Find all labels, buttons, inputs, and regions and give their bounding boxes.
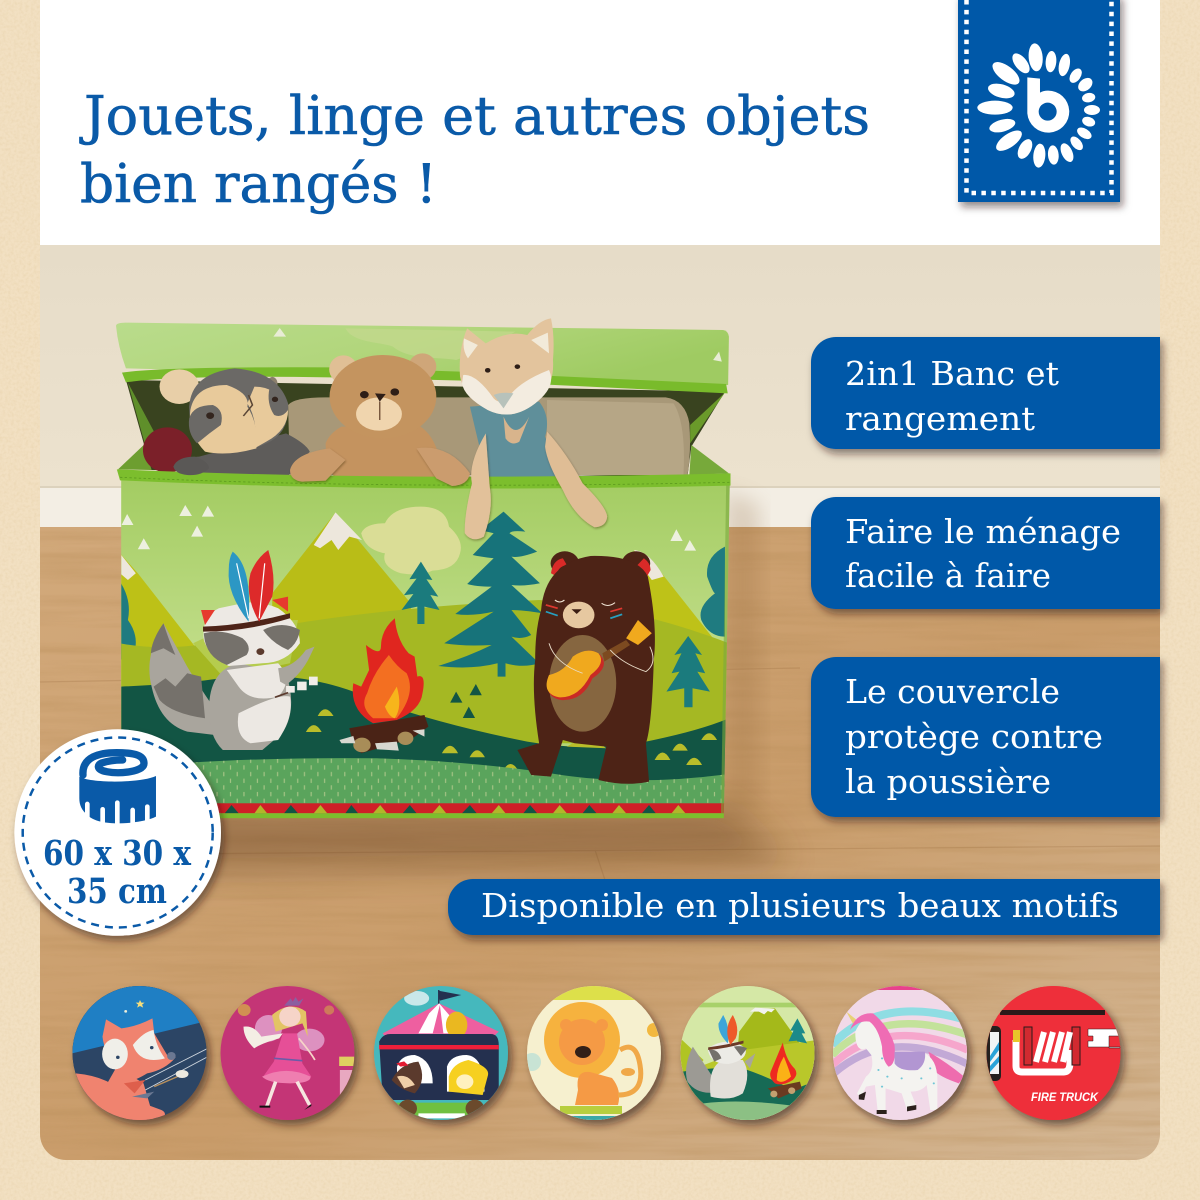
callout: couvercle: protège contre bbox=[845, 717, 1103, 756]
rim of the box bbox=[117, 469, 730, 488]
plush raccoon bbox=[160, 368, 310, 478]
baseboard bbox=[40, 486, 1160, 529]
photo scene bbox=[40, 245, 1160, 1167]
lid band bbox=[122, 367, 728, 393]
cloud bbox=[361, 507, 461, 574]
motif: fire truck bbox=[985, 986, 1121, 1132]
lid top bbox=[116, 323, 729, 385]
title bbox=[79, 86, 870, 215]
guitar bbox=[602, 640, 630, 662]
plush raccoon paw bbox=[173, 456, 203, 476]
plush bear bbox=[326, 353, 442, 480]
lid inside bbox=[126, 380, 725, 477]
callout: 2in1 bbox=[811, 337, 1160, 449]
grass strip bbox=[194, 758, 724, 804]
floor shadow under box bbox=[130, 808, 790, 872]
callout: motifs bbox=[448, 879, 1160, 935]
motif: princess bbox=[220, 986, 355, 1120]
header band bbox=[40, 0, 1160, 245]
yellow triangles on dark hill bbox=[306, 709, 717, 771]
icon: measuring tape bbox=[79, 753, 156, 827]
motif: raccoon bbox=[679, 983, 818, 1123]
raccoon illustration bbox=[149, 550, 318, 750]
title: bien rangés ! bbox=[80, 154, 437, 215]
brand logo tag bbox=[958, 0, 1120, 202]
cushion bbox=[288, 397, 690, 475]
plush fox bbox=[460, 318, 561, 480]
campfire bbox=[339, 618, 428, 753]
front panel with illustration bbox=[121, 478, 730, 813]
callout: motifs: Disponible en plusieurs beaux motifs bbox=[481, 886, 1119, 925]
callout: ménage: facile à faire bbox=[845, 556, 1051, 595]
callout: couvercle: la poussière bbox=[845, 762, 1051, 801]
motif: circus wagon bbox=[374, 986, 508, 1120]
back hill bbox=[120, 600, 729, 743]
title: Jouets, linge et autres objets bbox=[79, 86, 870, 147]
logo flower mark bbox=[977, 43, 1100, 168]
mountains bbox=[272, 513, 413, 630]
dimension badge: 35 cm bbox=[67, 871, 167, 912]
callout: 2in1: 2in1 Banc et bbox=[845, 354, 1059, 393]
zigzag stripe bbox=[216, 803, 724, 814]
motif: lion bbox=[523, 986, 661, 1124]
plush fox hanging arms bbox=[465, 432, 607, 539]
bear illustration bbox=[517, 551, 655, 784]
callout: ménage: Faire le ménage bbox=[845, 512, 1121, 551]
dimension badge: 60 x 30 x bbox=[43, 833, 192, 874]
dark hill bbox=[120, 675, 729, 787]
motif: fire truck: FIRE TRUCK bbox=[1031, 1090, 1099, 1104]
dimension badge bbox=[14, 729, 221, 936]
side blue bushes bbox=[120, 582, 136, 660]
callout: couvercle bbox=[811, 657, 1160, 817]
motif: unicorn bbox=[832, 983, 969, 1120]
motif: fox bbox=[69, 983, 211, 1123]
wall bbox=[40, 245, 1160, 490]
big pine bbox=[438, 512, 542, 677]
interior side walls bbox=[689, 445, 729, 475]
small pine bbox=[402, 562, 439, 624]
far triangles bbox=[122, 505, 696, 551]
plush bear arms bbox=[290, 448, 470, 486]
storage box bbox=[116, 318, 730, 819]
right pine bbox=[666, 636, 710, 707]
red cushion ball bbox=[143, 427, 192, 473]
wooden floor bbox=[40, 527, 1160, 1167]
callout: 2in1: rangement bbox=[845, 399, 1035, 438]
callout: ménage bbox=[811, 497, 1160, 609]
callout: couvercle: Le couvercle bbox=[845, 672, 1060, 711]
feathers bbox=[229, 552, 249, 622]
right box edge shading bbox=[721, 485, 730, 813]
